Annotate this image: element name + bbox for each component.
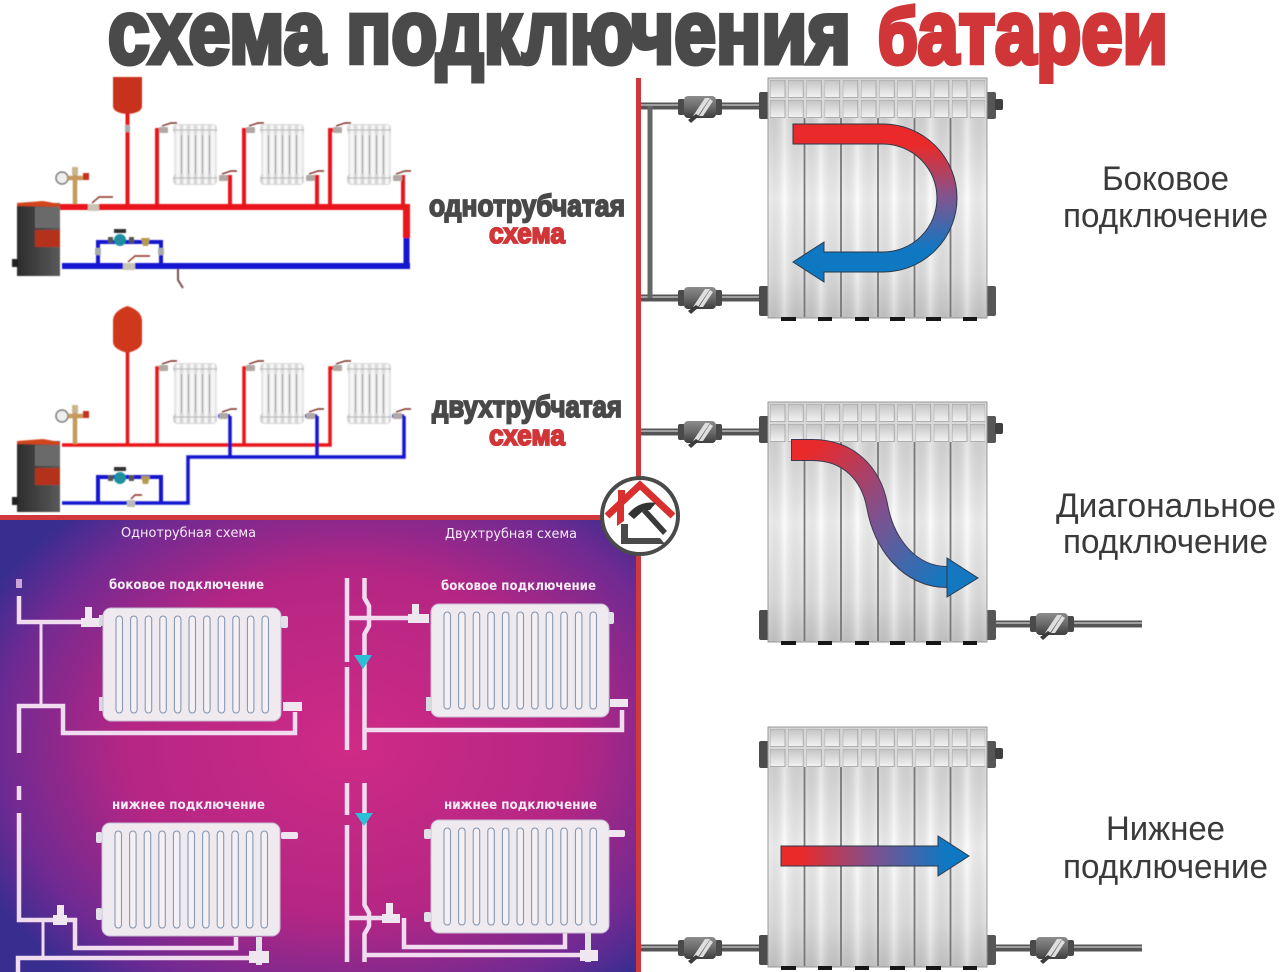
arrow: u-turn flow: [793, 124, 957, 282]
supply pipes: [62, 352, 338, 445]
icon: boiler: [12, 439, 60, 512]
label: one-pipe scheme: схема: [489, 218, 566, 250]
diagram: two-pipe side: [347, 578, 628, 750]
label: bottom one-pipe: нижнее подключение: [112, 798, 265, 813]
text: side connection: Боковое: [1102, 160, 1229, 198]
diagram: one-pipe side: [16, 579, 302, 753]
label: one-pipe scheme: [429, 188, 625, 250]
riser hot segment: [403, 204, 410, 238]
return pipes: [62, 416, 404, 503]
radiator body: [759, 78, 1003, 319]
text: bottom connection: [1063, 810, 1268, 886]
icon: house logo: [602, 478, 678, 554]
text: side connection: подключение: [1063, 197, 1268, 235]
text: diagonal connection: Диагональное: [1056, 487, 1276, 525]
text: bottom connection: Нижнее: [1106, 810, 1225, 848]
pump bypass: [98, 477, 161, 502]
icon: pump: [108, 467, 150, 507]
supply main: [60, 204, 410, 210]
arrow: diagonal flow: [791, 450, 978, 597]
heading: one-pipe: Однотрубная схема: [121, 526, 256, 541]
panel: one-pipe scheme: [12, 77, 411, 288]
radiator body: [759, 402, 1003, 643]
radiator: side connection: [641, 78, 1003, 319]
label: two-pipe scheme: схема: [489, 420, 566, 452]
icon: expansion tank: [113, 77, 142, 114]
radiators: [159, 123, 411, 185]
icon: lower valve: [678, 287, 722, 314]
pipes: [641, 944, 1142, 952]
icon: pressure group: [56, 167, 89, 204]
icon: expansion tank: [113, 306, 142, 353]
icon: left valve: [678, 937, 722, 964]
icon: pressure group: [56, 405, 89, 444]
icon: pump: [108, 229, 150, 246]
arrow: straight flow: [781, 836, 969, 876]
pipes: [641, 432, 1142, 624]
label: two-pipe scheme: [432, 389, 622, 452]
diagram: two-pipe bottom: [347, 783, 625, 962]
label: one-pipe scheme: однотрубчатая: [429, 188, 625, 223]
heading: two-pipe: Двухтрубная схема: [445, 527, 577, 542]
supply and return pipes: [641, 105, 762, 298]
valves: [88, 125, 183, 288]
radiators: [159, 361, 411, 424]
icon: right valve: [1030, 937, 1074, 964]
radiator: diagonal connection: [641, 402, 1142, 643]
label: two-pipe scheme: двухтрубчатая: [432, 389, 622, 424]
icon: boiler: [12, 201, 60, 276]
text: bottom connection: подключение: [1063, 848, 1268, 886]
label: bottom two-pipe: нижнее подключение: [444, 798, 597, 813]
text: side connection: [1063, 160, 1268, 235]
text: diagonal connection: [1056, 487, 1276, 561]
panel: two-pipe scheme: [12, 306, 411, 512]
icon: lower valve: [1030, 613, 1074, 640]
divider: red lines: [0, 78, 641, 972]
return pipes: [62, 238, 410, 269]
diagram: one-pipe bottom: [18, 786, 298, 972]
radiator: bottom connection: [641, 727, 1142, 968]
pump bypass: [98, 242, 161, 264]
text: diagonal connection: подключение: [1063, 523, 1268, 561]
icon: upper valve: [678, 96, 722, 123]
radiator body: [759, 727, 1003, 968]
label: side two-pipe: боковое подключение: [441, 579, 596, 594]
panel: purple connection diagrams: [0, 519, 637, 972]
icon: upper valve: [678, 421, 722, 448]
supply pipes: [62, 113, 410, 207]
label: side one-pipe: боковое подключение: [109, 578, 264, 593]
